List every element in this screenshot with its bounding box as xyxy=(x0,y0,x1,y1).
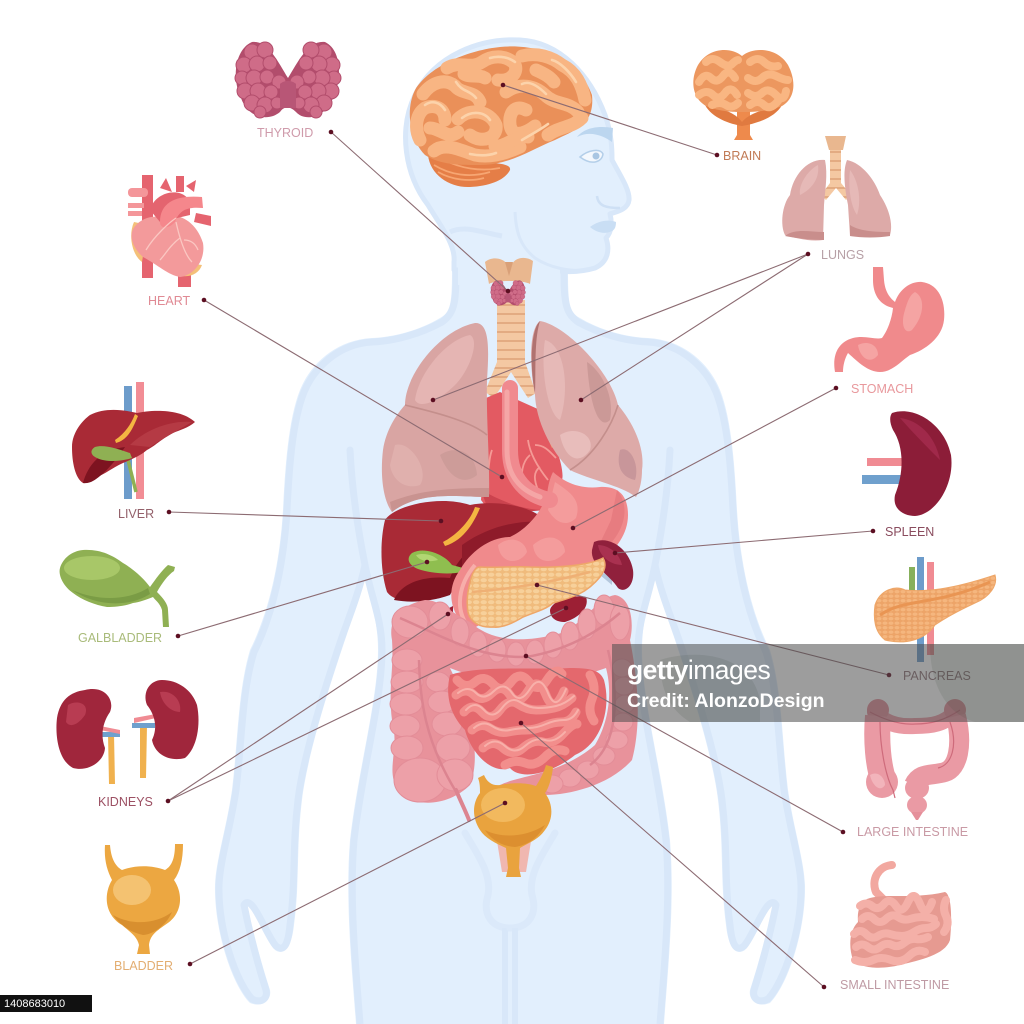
icon: stomach xyxy=(834,267,944,372)
icon: liver xyxy=(72,382,195,499)
organ: thyroid in body xyxy=(491,280,526,306)
label: pancreas: PANCREAS xyxy=(903,669,971,683)
organ: gallbladder in body xyxy=(409,551,463,573)
organ: liver in body xyxy=(381,501,545,602)
watermark: gettyimages xyxy=(627,655,771,685)
body silhouette xyxy=(215,40,805,1024)
watermark: Credit: AlonzoDesign xyxy=(627,690,825,712)
label: stomach: STOMACH xyxy=(851,382,913,396)
leader dots xyxy=(166,83,891,989)
icon: large intestine xyxy=(866,699,966,820)
image id tag xyxy=(0,995,92,1012)
organ: trachea and larynx xyxy=(485,258,536,398)
label: thyroid: THYROID xyxy=(257,126,313,140)
leader lines xyxy=(168,85,889,987)
organ: small intestine in body xyxy=(448,668,606,774)
organ: kidneys behind stomach xyxy=(445,596,587,622)
label: lungs: LUNGS xyxy=(821,248,864,262)
label: bladder: BLADDER xyxy=(114,959,173,973)
organ: heart in body xyxy=(481,392,563,515)
icon: small intestine xyxy=(850,865,951,968)
label: brain: BRAIN xyxy=(723,149,761,163)
icon: bladder xyxy=(105,844,183,954)
organ: bladder in body xyxy=(474,765,553,877)
label: spleen: SPLEEN xyxy=(885,525,934,539)
organ: left lung in body xyxy=(382,323,489,512)
organ: large intestine in body xyxy=(390,595,638,820)
icon: gallbladder xyxy=(60,550,175,627)
organ: pancreas in body xyxy=(467,558,605,627)
icon: brain front view xyxy=(693,50,793,140)
organ: brain in body xyxy=(410,46,592,187)
image id tag: 1408683010 xyxy=(4,998,65,1010)
label: liver: LIVER xyxy=(118,507,154,521)
organ: stomach in body xyxy=(451,472,628,630)
organ: right lung in body xyxy=(531,321,643,497)
label: gallbladder: GALBLADDER xyxy=(78,631,162,645)
organ: oesophagus in body xyxy=(507,388,550,500)
icon: lungs xyxy=(782,136,891,241)
icon: kidneys xyxy=(56,680,198,784)
icon: spleen xyxy=(862,411,952,516)
label: small intestine: SMALL INTESTINE xyxy=(840,978,949,992)
icon: thyroid xyxy=(235,42,341,118)
organ: spleen in body xyxy=(592,540,633,590)
watermark xyxy=(612,644,1024,722)
label: kidneys: KIDNEYS xyxy=(98,795,153,809)
icon: heart xyxy=(128,175,211,287)
icon: pancreas xyxy=(874,557,996,662)
label: large intestine: LARGE INTESTINE xyxy=(857,825,968,839)
colon haustra xyxy=(390,595,635,802)
head xyxy=(406,40,629,285)
label: heart: HEART xyxy=(148,294,191,308)
